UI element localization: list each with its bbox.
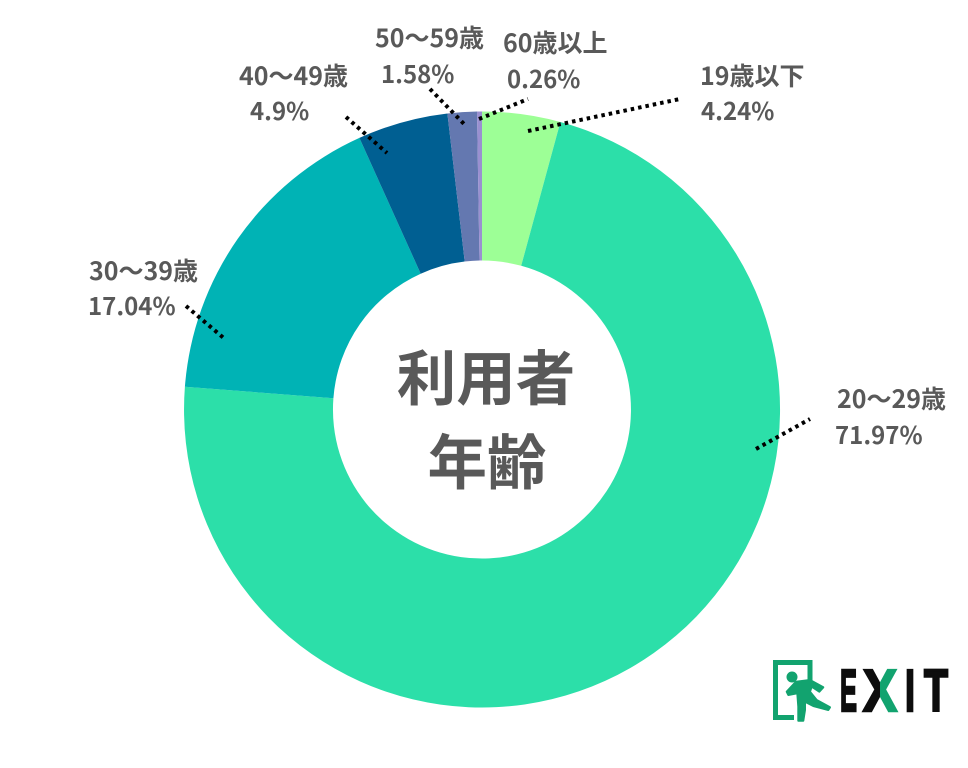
center title: 利用者	[397, 332, 575, 418]
leader line: 30〜39歳	[186, 306, 226, 340]
center title: 年齢	[428, 416, 546, 502]
label: 50〜59歳: 50～59歳	[375, 19, 484, 55]
segment: 40〜49歳	[359, 114, 465, 274]
icon: exit door	[776, 662, 810, 718]
logo wordmark	[840, 658, 948, 724]
icon: running person	[787, 672, 830, 721]
center title	[397, 332, 575, 502]
label: 19歳以下: 4.24%	[701, 92, 774, 127]
label: 30〜39歳: 17.04%	[88, 287, 176, 322]
segment: 50〜59歳	[447, 112, 480, 262]
logo wordmark: I	[905, 658, 915, 724]
segment: 19歳以下	[482, 112, 560, 266]
label: 50〜59歳: 1.58%	[381, 55, 454, 90]
leader line: 50〜59歳	[430, 89, 465, 125]
leader line: 40〜49歳	[346, 117, 387, 153]
leader line: 60歳以上	[479, 99, 528, 119]
segment: 20〜29歳	[184, 122, 780, 708]
logo: EXIT	[776, 658, 948, 724]
label: 40〜49歳: 4.9%	[250, 92, 309, 127]
logo wordmark: X	[863, 658, 897, 724]
label: 60歳以上: 0.26%	[507, 60, 580, 95]
label: 40〜49歳: 40～49歳	[239, 57, 348, 93]
leader line: 20〜29歳	[756, 419, 810, 449]
logo wordmark: T	[924, 658, 948, 724]
leader line: 19歳以下	[528, 99, 680, 131]
segment: 60歳以上	[477, 111, 482, 260]
label: 20〜29歳: 20～29歳	[837, 380, 946, 416]
label: 30〜39歳: 30～39歳	[89, 252, 198, 288]
segment: 30〜39歳	[185, 138, 421, 398]
label: 19歳以下: 19歳以下	[700, 57, 805, 93]
logo wordmark: E	[840, 658, 857, 724]
label: 60歳以上: 60歳以上	[503, 24, 608, 60]
donut chart	[184, 111, 780, 708]
label: 20〜29歳: 71.97%	[835, 416, 923, 451]
